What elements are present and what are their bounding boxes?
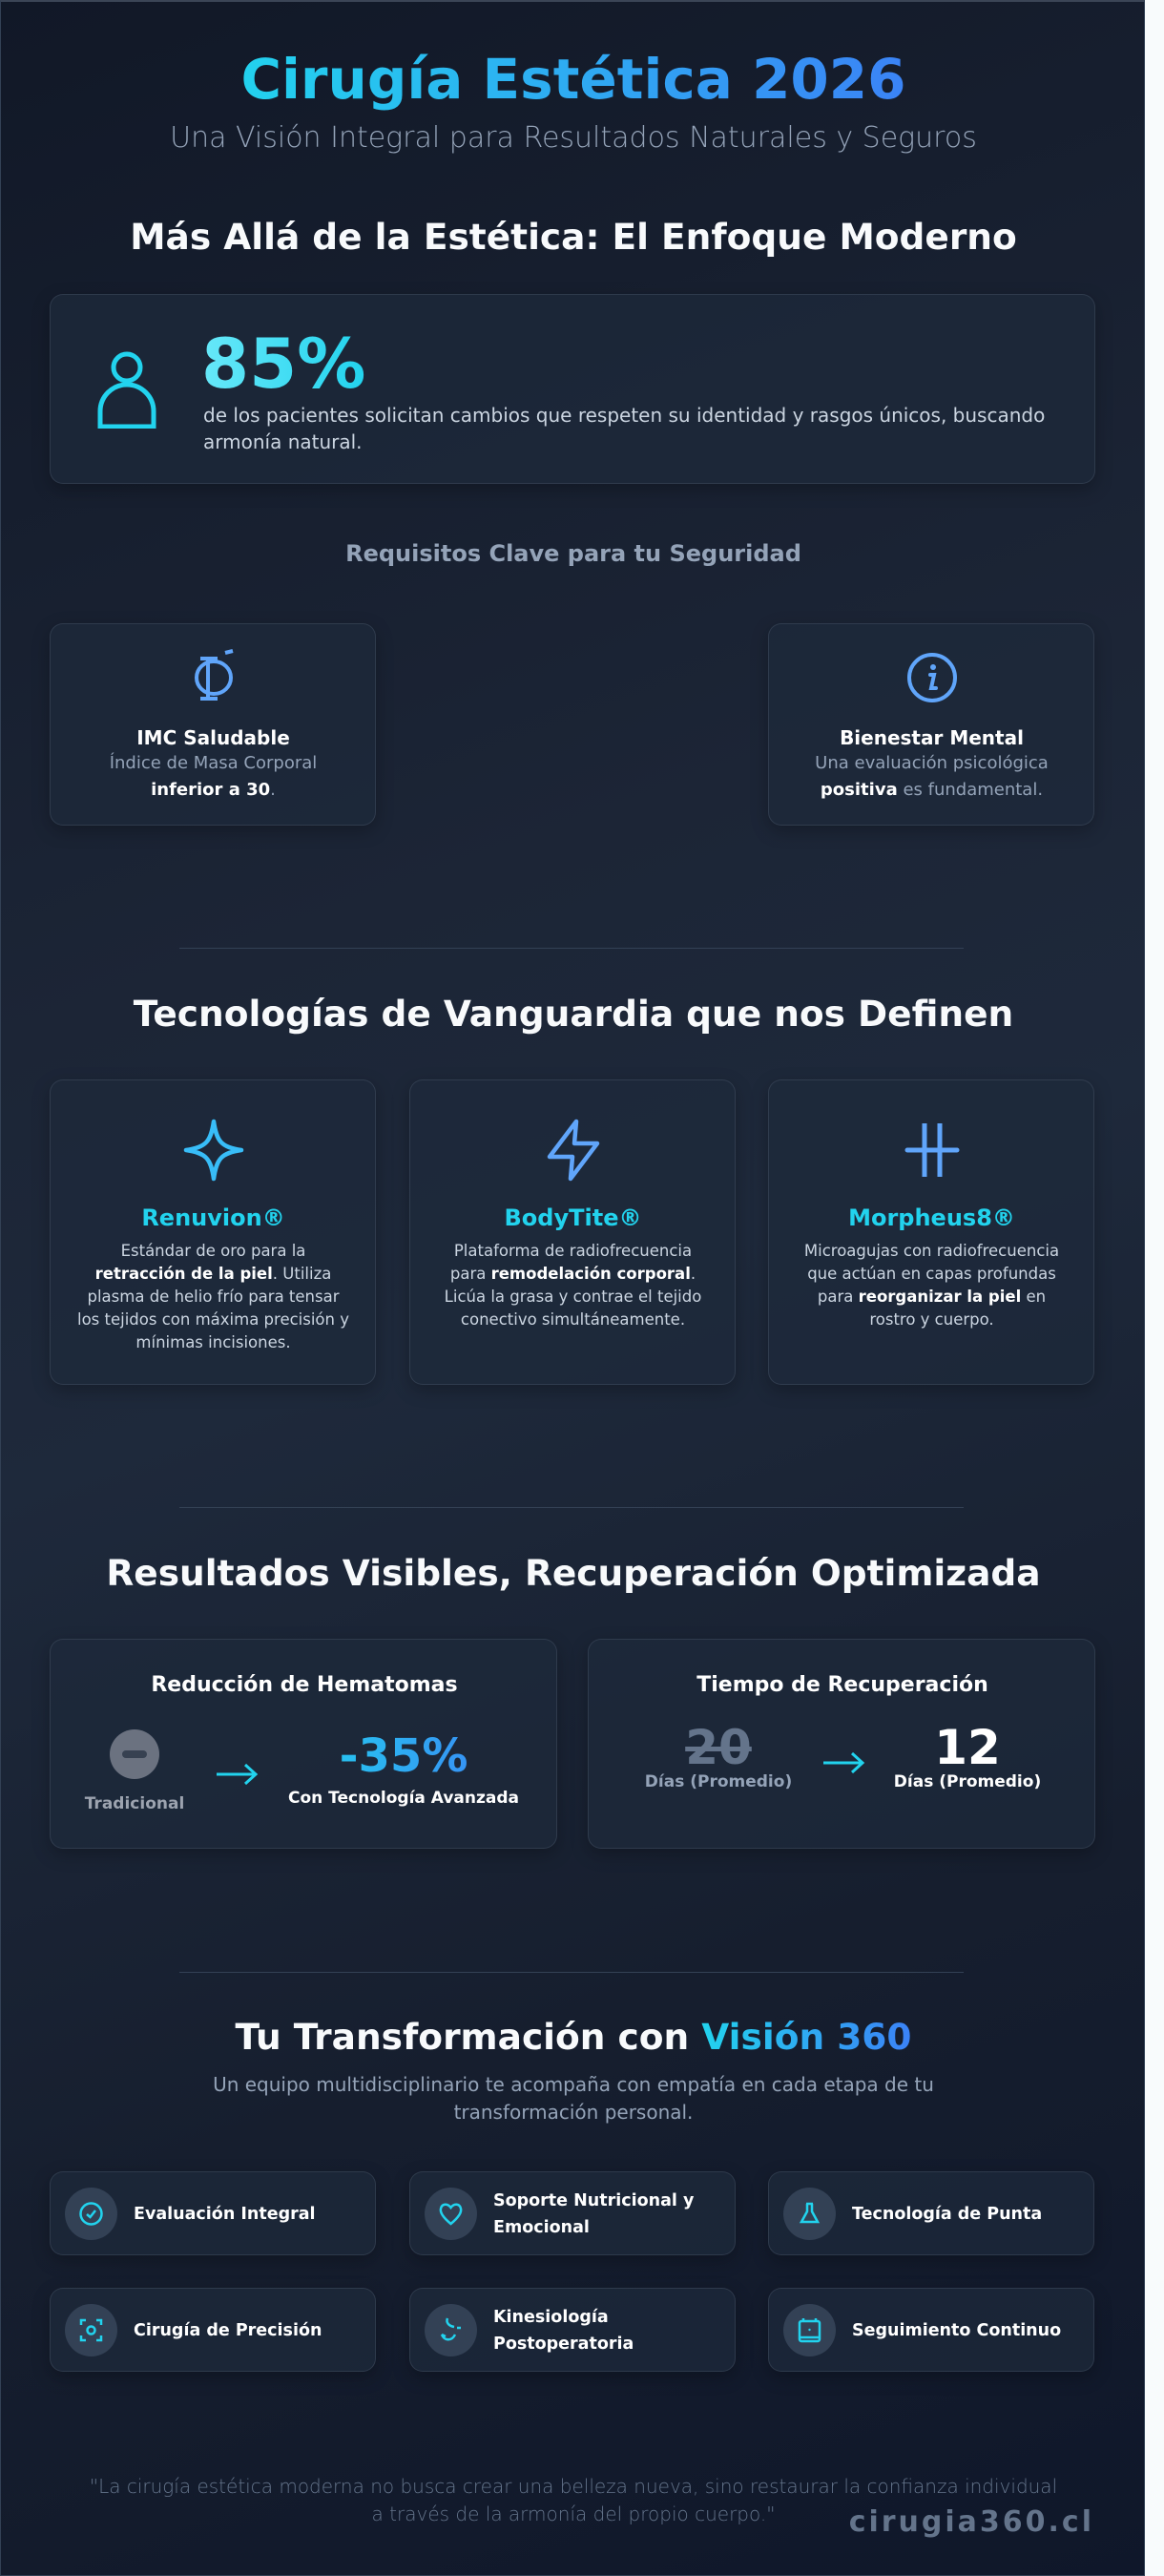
label: Kinesiología Postoperatoria: [493, 2308, 634, 2354]
panel: recuperación: [588, 1639, 1095, 1849]
description: rostro y cuerpo.: [869, 1310, 994, 1329]
arrow: [823, 1752, 864, 1773]
heading: requisitos: Requisitos Clave para tu Seguridad: [345, 540, 801, 567]
brand: cirugia360.cl: [849, 2505, 1094, 2539]
title: Tiempo de Recuperación: [696, 1673, 988, 1697]
stat: -35%: -35%: [340, 1729, 468, 1783]
text: team description: Un equipo multidisciplinario te acompaña con empatía en cada etapa de tu transformación personal.: [213, 2073, 934, 2124]
title: IMC Saludable: [136, 726, 290, 749]
description: Plataforma de radiofrecuencia: [454, 1242, 692, 1260]
description: Estándar de oro para la: [121, 1242, 305, 1260]
icon: needles: [904, 1123, 960, 1177]
label: avanzada: Con Tecnología Avanzada: [288, 1789, 519, 1808]
description: para remodelación corporal.: [450, 1265, 696, 1283]
label: Tecnología de Punta: [852, 2205, 1042, 2224]
title: Renuvion®: [141, 1204, 285, 1231]
icon: IMC: [195, 649, 233, 701]
stat number: 85%: [201, 324, 365, 404]
panel: Renuvion: [50, 1079, 376, 1385]
description: Una evaluación psicológica: [815, 753, 1049, 773]
icon: info: [907, 653, 957, 702]
heading: resultados: Resultados Visibles, Recuperación Optimizada: [106, 1552, 1041, 1594]
panel: tecnología de punta: [768, 2171, 1094, 2255]
stat: 20 days: 20: [685, 1720, 752, 1775]
title: Cirugía Estética 2026: [240, 47, 906, 112]
panel: bienestar mental: [768, 623, 1094, 826]
heading: enfoque moderno: Más Allá de la Estética: El Enfoque Moderno: [130, 216, 1017, 258]
description: retracción de la piel. Utiliza: [95, 1265, 331, 1283]
panel: 85% stat: [50, 294, 1095, 484]
icon: stretch: [425, 2304, 477, 2356]
description: conectivo simultáneamente.: [461, 1310, 685, 1329]
description: Índice de Masa Corporal: [110, 753, 317, 773]
label: Seguimiento Continuo: [852, 2321, 1061, 2340]
icon: tablet: [783, 2304, 836, 2356]
quote: "La cirugía estética moderna no busca crear una belleza nueva, sino restaurar la confianza individual: [90, 2475, 1057, 2498]
description: [445, 1242, 701, 1329]
description: [804, 1242, 1059, 1329]
icon: check: [65, 2188, 117, 2240]
icon: heart: [425, 2188, 477, 2240]
label: Evaluación Integral: [134, 2205, 316, 2224]
panel: BodyTite: [409, 1079, 736, 1385]
description: [815, 753, 1049, 800]
icon: focus: [65, 2304, 117, 2356]
title: Morpheus8®: [848, 1204, 1015, 1231]
icon: flask: [783, 2188, 836, 2240]
title: BodyTite®: [505, 1204, 641, 1231]
label: Soporte Nutricional y Emocional: [493, 2191, 694, 2237]
heading: visión 360: Tu Transformación con Visión 360: [235, 2016, 911, 2058]
subtitle: Una Visión Integral para Resultados Naturales y Seguros: [170, 121, 977, 155]
icon: person: [97, 351, 156, 429]
panel: cirugía de precisión: [50, 2288, 376, 2372]
arrow: [217, 1764, 258, 1785]
label: Cirugía de Precisión: [134, 2321, 322, 2340]
description: los tejidos con máxima precisión y: [77, 1310, 349, 1329]
panel: IMC saludable: [50, 623, 376, 826]
label: tradicional: Tradicional: [85, 1794, 184, 1813]
label: Días (Promedio): [894, 1772, 1041, 1791]
stat: 12 days: 12: [934, 1720, 1001, 1775]
panel: kinesiología: [409, 2288, 736, 2372]
description: plasma de helio frío para tensar: [88, 1288, 340, 1306]
stat: -35%: [284, 1729, 523, 1783]
panel: evaluación integral: [50, 2171, 376, 2255]
title: Bienestar Mental: [840, 726, 1024, 749]
description: [77, 1242, 349, 1351]
heading: tecnologías: Tecnologías de Vanguardia que nos Definen: [134, 993, 1013, 1035]
icon: traditional: [110, 1729, 159, 1779]
description: positiva es fundamental.: [821, 780, 1043, 800]
description: mínimas incisiones.: [135, 1333, 291, 1351]
icon: lightning: [548, 1119, 599, 1182]
quote: [90, 2475, 1057, 2525]
icon: sparkle: [183, 1119, 244, 1182]
panel: soporte nutricional: [409, 2171, 736, 2255]
description: que actúan en capas profundas: [807, 1265, 1056, 1283]
quote: a través de la armonía del propio cuerpo.": [372, 2503, 775, 2525]
description: Microagujas con radiofrecuencia: [804, 1242, 1059, 1260]
stat description: de los pacientes solicitan cambios que respeten su identidad y rasgos únicos, buscando armonía natural.: [203, 404, 1045, 453]
panel: hematomas: [50, 1639, 557, 1849]
description: inferior a 30.: [151, 780, 276, 800]
label: Días (Promedio): [645, 1772, 792, 1791]
panel: seguimiento continuo: [768, 2288, 1094, 2372]
title: Reducción de Hematomas: [151, 1673, 458, 1697]
description: Licúa la grasa y contrae el tejido: [445, 1288, 701, 1306]
description: para reorganizar la piel en: [818, 1288, 1046, 1306]
description: [110, 752, 317, 800]
panel: Morpheus8: [768, 1079, 1094, 1385]
